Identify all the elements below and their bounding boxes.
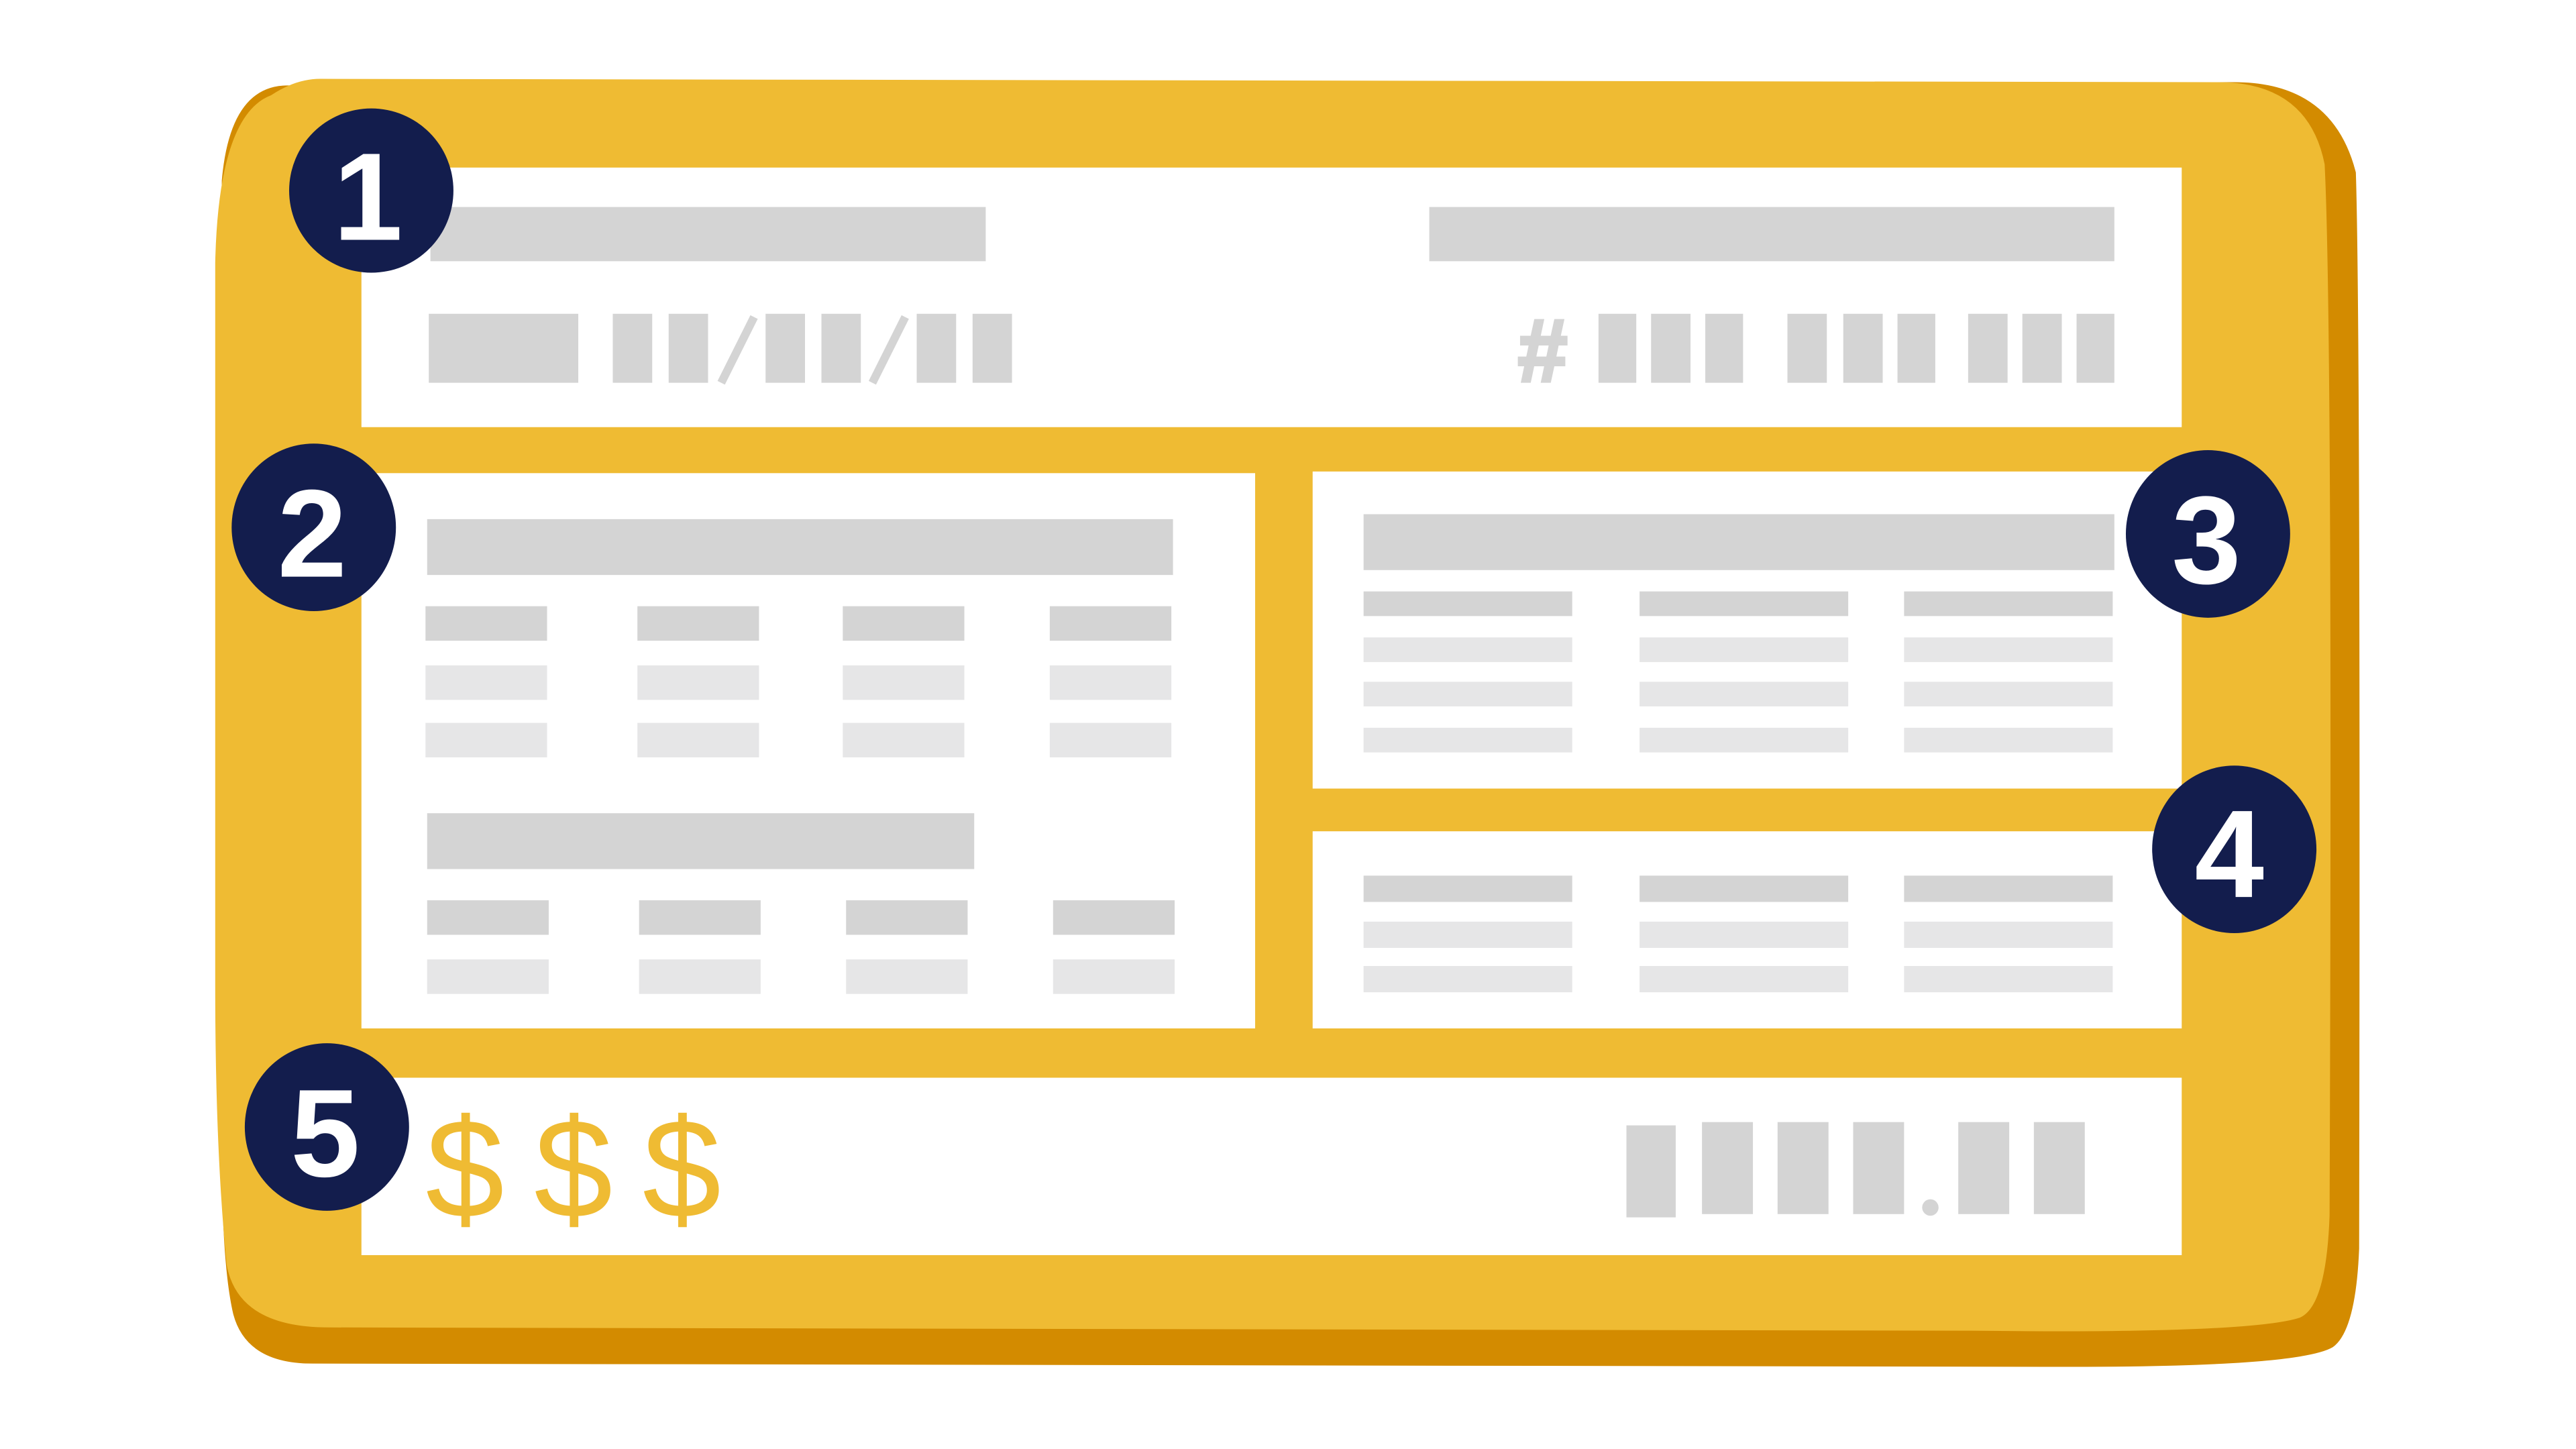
badge 2 [231, 443, 396, 611]
panel 3: details table [1313, 472, 2182, 789]
panel 2: item table [362, 473, 1255, 1028]
panel 1: header info [362, 168, 2182, 427]
badge 5: 5 [290, 1064, 360, 1203]
badge 4 [2152, 765, 2316, 933]
badge 2: 2 [278, 465, 347, 604]
card: receipt background [215, 79, 2359, 1367]
badge 1: 1 [333, 128, 402, 267]
panel 4: summary table [1313, 831, 2182, 1028]
badge 3 [2126, 450, 2290, 618]
panel 5: total amount: $ [425, 1089, 504, 1248]
badge 5 [245, 1043, 409, 1211]
panel 1: header info: # [1518, 301, 1567, 400]
panel 5: total amount: $ [534, 1089, 612, 1248]
panel 5: total amount: $ [643, 1089, 721, 1248]
badge 4: 4 [2195, 785, 2264, 924]
badge 3: 3 [2171, 471, 2241, 610]
badge 1 [289, 109, 453, 273]
panel 5: total amount [362, 1078, 2182, 1255]
